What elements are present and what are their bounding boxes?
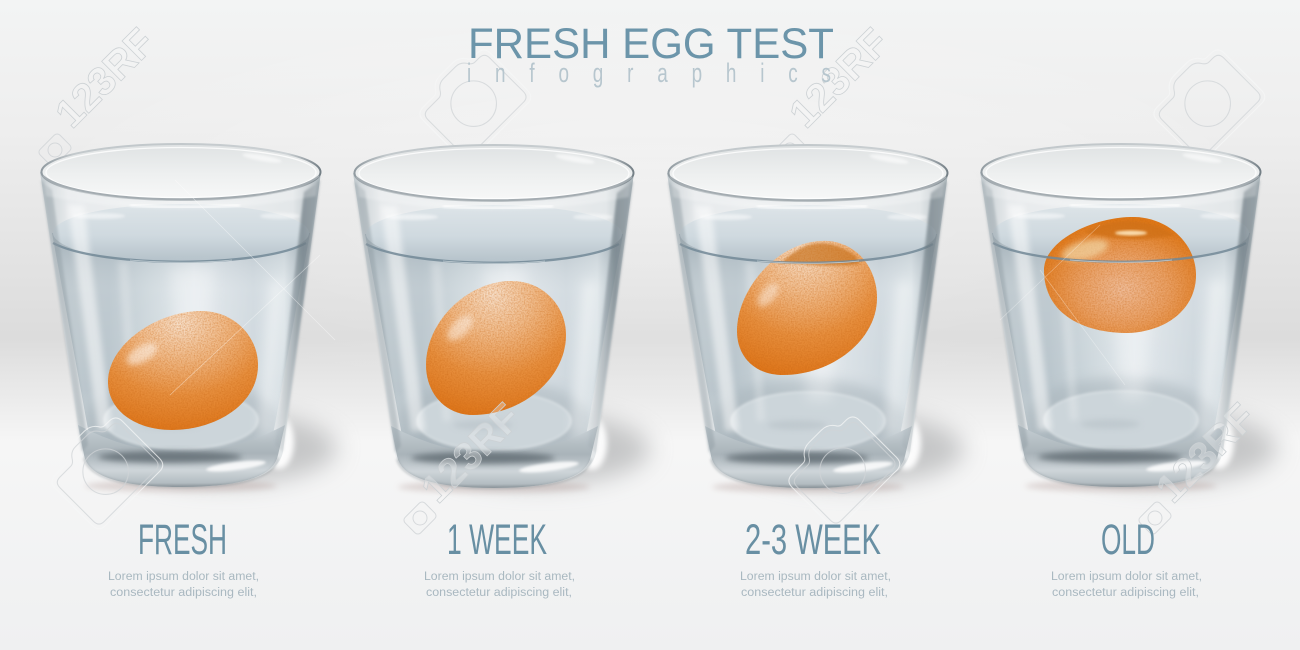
label: fresh bbox=[108, 516, 259, 599]
lens lines on first glass bbox=[170, 180, 335, 395]
label: old: Lorem ipsum dolor sit amet, bbox=[1051, 571, 1202, 583]
watermarks over glasses: 123RF bbox=[413, 395, 529, 511]
title bbox=[467, 20, 834, 88]
label: 2-3 week: consectetur adipiscing elit, bbox=[741, 587, 888, 599]
watermarks: 123RF bbox=[781, 20, 897, 136]
watermarks bbox=[37, 20, 1268, 168]
watermarks over glasses bbox=[41, 395, 1264, 536]
label: old bbox=[1051, 516, 1202, 599]
label: 2-3 week bbox=[740, 516, 891, 599]
label: old: consectetur adipiscing elit, bbox=[1052, 587, 1199, 599]
label: 2-3 week: 2-3 WEEK bbox=[745, 516, 881, 564]
glass: fresh egg sunk at bottom bbox=[40, 144, 337, 492]
label: 1 week: 1 WEEK bbox=[447, 516, 547, 564]
egg rising to the surface bbox=[737, 241, 877, 375]
label: fresh: Lorem ipsum dolor sit amet, bbox=[108, 571, 259, 583]
label: fresh: FRESH bbox=[138, 516, 227, 564]
egg tilted up bbox=[426, 281, 566, 415]
watermark lines on egg's glass bbox=[1000, 225, 1125, 385]
subheading: infographics: infographics bbox=[467, 58, 831, 88]
label: 2-3 week: Lorem ipsum dolor sit amet, bbox=[740, 571, 891, 583]
label: 1 week: consectetur adipiscing elit, bbox=[426, 587, 572, 599]
label: 1 week: Lorem ipsum dolor sit amet, bbox=[424, 571, 575, 583]
watermarks: 123RF bbox=[47, 20, 163, 136]
heading: fresh egg test: FRESH EGG TEST bbox=[468, 20, 834, 68]
watermarks over glasses: 123RF bbox=[1148, 395, 1264, 511]
label: fresh: consectetur adipiscing elit, bbox=[110, 587, 257, 599]
egg lying flat on the bottom bbox=[108, 311, 258, 430]
egg floating at the surface bbox=[1044, 217, 1196, 333]
glass: 2-3 week egg rising bbox=[667, 145, 964, 493]
glass: 1 week egg tilted bbox=[353, 145, 650, 493]
label: old: OLD bbox=[1101, 516, 1155, 564]
glass: old egg floating bbox=[980, 144, 1277, 492]
label: 1 week bbox=[424, 516, 575, 599]
